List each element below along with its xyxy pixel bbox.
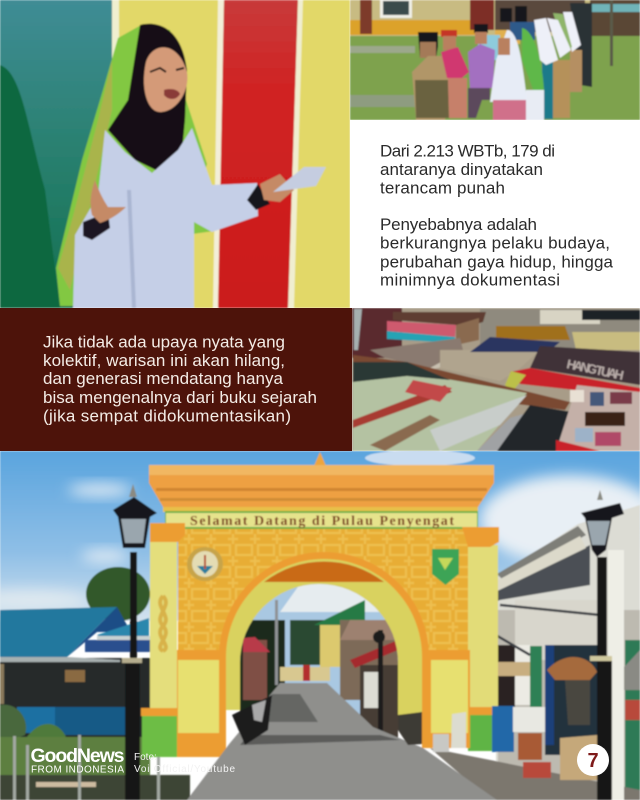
right buildings and awning (495, 505, 640, 791)
welcome banner: Selamat Datang di Pulau Penyengat (190, 514, 454, 529)
text block: causes: Penyebabnya adalah (380, 215, 537, 234)
left column (141, 523, 185, 757)
panel: text, endangered heritage facts (350, 120, 640, 308)
text block: causes: perubahan gaya hidup, hingga (380, 252, 614, 271)
right column (462, 527, 499, 751)
arch (219, 552, 429, 757)
text block: warning: bisa mengenalnya dari buku sejarah (43, 388, 317, 407)
back row children (478, 0, 592, 87)
photo credit (134, 752, 235, 775)
right hand with paper (247, 167, 326, 210)
child in brown sarong (412, 31, 450, 120)
book pages (478, 414, 524, 451)
text block: causes: berkurangnya pelaku budaya, (380, 234, 610, 253)
red book band (504, 367, 640, 392)
left lamp post (113, 484, 157, 800)
child in purple shirt (468, 24, 495, 118)
child in pink shirt (441, 30, 469, 118)
gate (141, 452, 499, 757)
row of girls in hijab (534, 12, 582, 119)
gate cornice (149, 452, 494, 512)
logo: GoodNews from Indonesia: GoodNews (30, 745, 125, 767)
emblem: left (187, 547, 223, 581)
text block: warning: kolektif, warisan ini akan hilang, (43, 351, 285, 370)
text block: causes: minimnya dokumentasi (380, 270, 560, 289)
text block: warning: Jika tidak ada upaya nyata yang (43, 332, 285, 352)
gate body (178, 528, 468, 658)
green scarf (56, 24, 214, 306)
girl in green hijab (522, 28, 544, 120)
view through the arch (239, 582, 400, 738)
text block: causes (380, 215, 614, 289)
dark book cover (497, 405, 572, 451)
text block: statistics: Dari 2.213 WBTb, 179 di (380, 142, 555, 161)
sky (0, 451, 640, 621)
text block: statistics (380, 142, 555, 197)
lower wall panels (177, 650, 470, 757)
text block: statistics: antaranya dinyatakan (380, 160, 543, 179)
emblem: right (432, 549, 459, 585)
left hand (83, 180, 126, 240)
white dress (73, 128, 258, 308)
book title: Hang Tuah: HANG TUAH (565, 356, 625, 383)
green book with title (353, 362, 527, 451)
photo credit: Voi Official/Youtube (134, 764, 235, 775)
photo: stack of history books (352, 308, 640, 451)
text block: warning: (jika sempat didokumentasikan) (43, 407, 291, 426)
road and pavement (187, 683, 640, 800)
photo: Pulau Penyengat welcome gate (0, 450, 640, 800)
photo: children in traditional dress in a line (350, 0, 640, 120)
goods and stalls (433, 706, 597, 780)
open books, middle (440, 337, 640, 385)
text block: warning: dan generasi mendatang hanya (43, 369, 284, 388)
right lamp post (581, 490, 624, 800)
girl in white hijab (490, 30, 527, 120)
colorful magazine (556, 385, 640, 451)
photo credit: Foto: (134, 752, 157, 763)
logo: GoodNews from Indonesia: FROM INDONESIA (31, 764, 124, 776)
text block: warning (43, 332, 317, 426)
brown cardboard edge (353, 355, 570, 410)
left buildings and greenery (0, 567, 190, 800)
text block: statistics: terancam punah (380, 178, 505, 197)
page number badge (577, 744, 609, 776)
stacked books (370, 312, 486, 370)
panel: warning message (0, 308, 352, 451)
motorcycles (232, 695, 422, 745)
hijab and face (108, 24, 187, 172)
photo: girl performing in front of painted wall (0, 0, 350, 308)
page number badge: 7 (587, 750, 599, 772)
